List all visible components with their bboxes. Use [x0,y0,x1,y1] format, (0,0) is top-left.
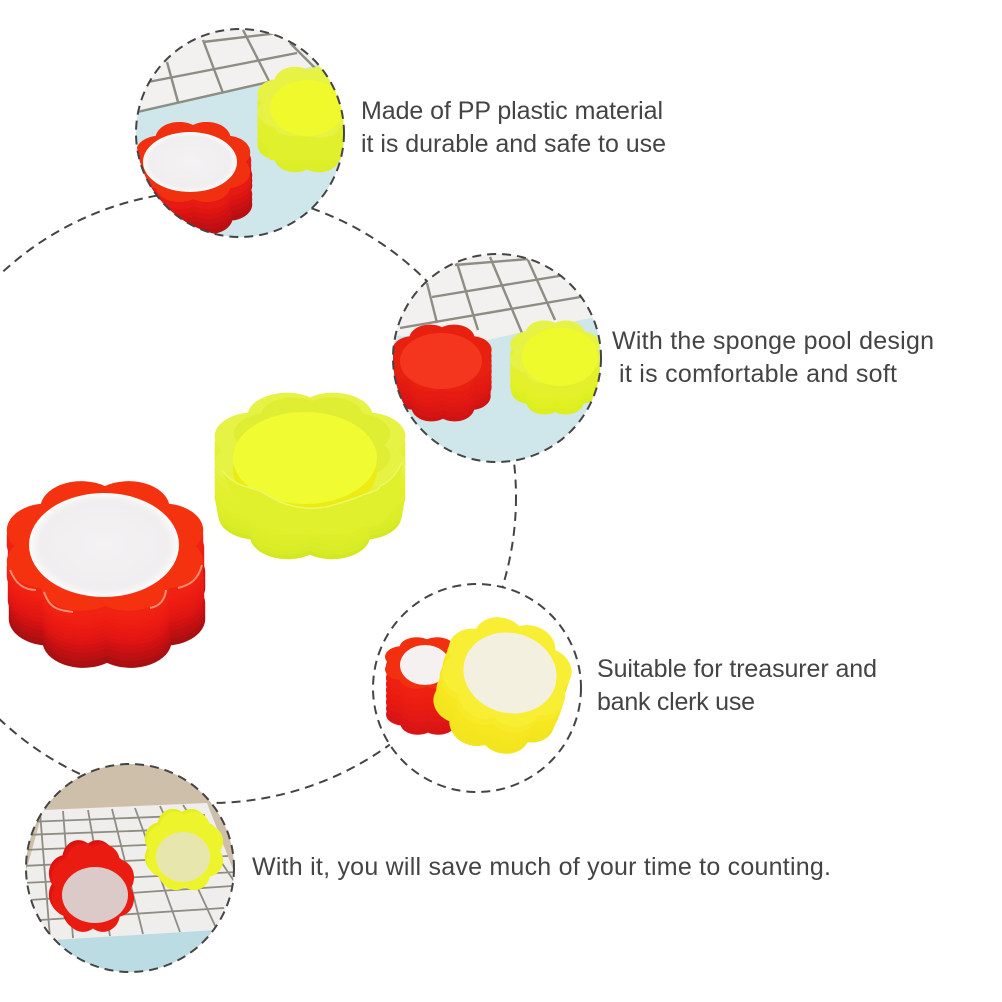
caption 3: Suitable for treasurer and [597,655,877,683]
photo circle 4: pads on tile mat [20,760,240,980]
caption 2: With the sponge pool design [612,327,934,355]
photo circle 2: pads with covers [385,250,605,470]
caption 3: bank clerk use [597,688,755,716]
caption 4: With it, you will save much of your time to counting. [252,853,831,881]
caption 1 [361,97,666,158]
photo circle 1: pads on tile [135,28,345,238]
photo circle 3: stacked pads [373,584,581,792]
main product: red sponge pad [7,481,205,668]
caption 2 [612,327,934,388]
caption 3 [597,655,877,716]
dashed connecting ring [0,191,516,803]
caption 1: it is durable and safe to use [361,130,666,158]
main product: yellow pad with cover disc [215,393,405,559]
caption 2: it is comfortable and soft [619,360,897,388]
caption 1: Made of PP plastic material [361,97,663,125]
